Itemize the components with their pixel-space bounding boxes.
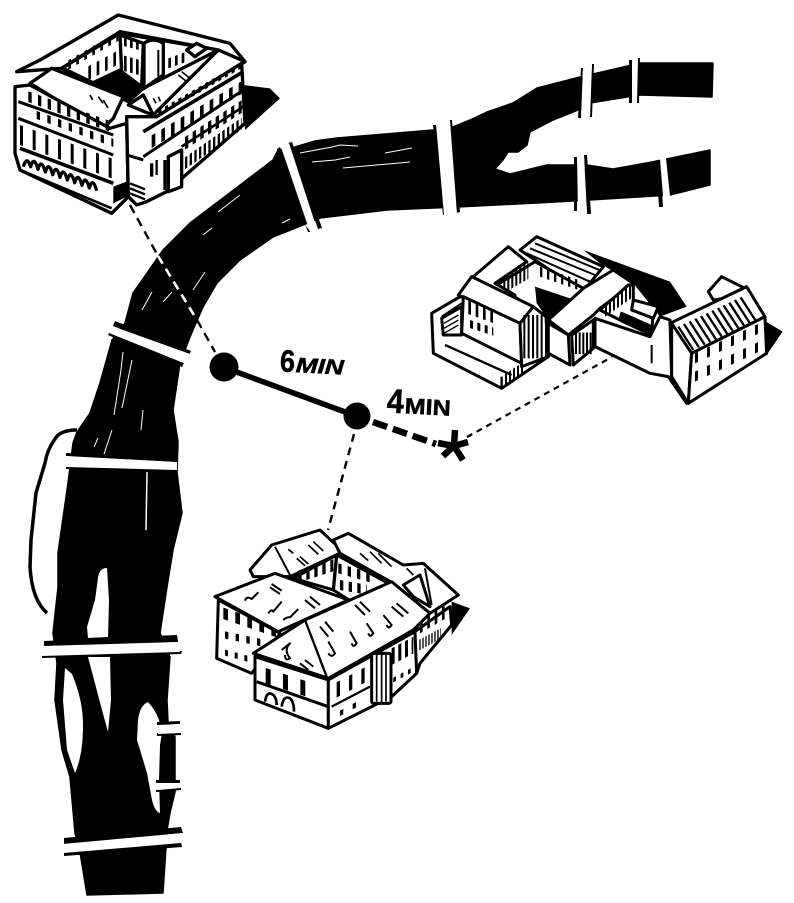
lower complex shadow: [452, 602, 470, 635]
lower complex front walls: [255, 632, 417, 728]
complex shadows: [583, 250, 783, 355]
palace right facade: [127, 63, 245, 205]
bridge: bend: [108, 321, 191, 367]
complex central wing: [548, 270, 633, 365]
lower complex back left roof: [250, 530, 343, 577]
lower complex courtyard: [293, 555, 388, 602]
palace shadow: [243, 85, 280, 130]
river islands: [63, 568, 162, 813]
bridge: side channel lower: [156, 780, 181, 792]
bridge: side channel upper: [157, 721, 181, 736]
dashed link: second stop to lower complex: [328, 434, 354, 530]
route line: 4 min dashed segment: [373, 422, 436, 444]
building: lower complex: [215, 530, 470, 728]
palace left facade: [15, 85, 128, 213]
icon: destination asterisk: [438, 430, 468, 460]
lower complex far right wall: [390, 607, 452, 697]
bridge: bottom main: [63, 827, 183, 856]
complex main gabled block: [458, 277, 548, 367]
label: 4 min: 4: [386, 382, 405, 421]
complex back box: [708, 277, 745, 300]
complex forecourt wing: [432, 297, 548, 388]
building: top left palace: [15, 15, 280, 213]
palace left roof: [30, 68, 123, 128]
label: 6 min: 6: [279, 343, 296, 379]
lower complex front roof: [253, 582, 430, 678]
bridge: top branch 1: [578, 64, 594, 118]
route stop: second: [344, 402, 370, 430]
complex back wing striped roof: [520, 237, 603, 290]
palace right roof: [128, 50, 245, 117]
lower complex back right roof: [333, 533, 458, 613]
dashed link: top palace to first stop: [130, 205, 215, 352]
route stop: first: [210, 352, 238, 382]
bridge: lower branch 2: [656, 158, 671, 208]
river map: [30, 58, 713, 895]
lower complex left block: [215, 573, 348, 673]
complex right gabled building: [670, 287, 767, 403]
complex left wing roof: [473, 247, 527, 295]
bridge: top branch 2: [629, 58, 640, 104]
side stream: [30, 430, 77, 613]
complex inner yard: [600, 285, 658, 335]
river current flecks: [94, 145, 412, 530]
bridge: upper main: [66, 453, 177, 471]
label: 4 min: [386, 382, 452, 424]
palace courtyard: [62, 33, 218, 102]
bridge: lower branch 1: [574, 155, 591, 214]
river body: [53, 63, 713, 895]
bridge: lower main: [42, 635, 182, 658]
label: 4 min: MIN: [404, 393, 451, 421]
bridge: upper arm 1: [277, 142, 322, 232]
complex courtyard: [497, 262, 583, 320]
dashed link: destination to right complex: [467, 357, 612, 437]
route line: 6 min segment: [223, 367, 356, 416]
complex connecting wall: [595, 317, 687, 403]
bridges: [42, 58, 671, 856]
palace back roof: [17, 15, 245, 72]
label: 6 min: MIN: [295, 354, 345, 380]
label: 6 min: [279, 343, 346, 382]
building: right complex: [432, 237, 783, 403]
bridge: upper arm 2: [433, 120, 460, 215]
